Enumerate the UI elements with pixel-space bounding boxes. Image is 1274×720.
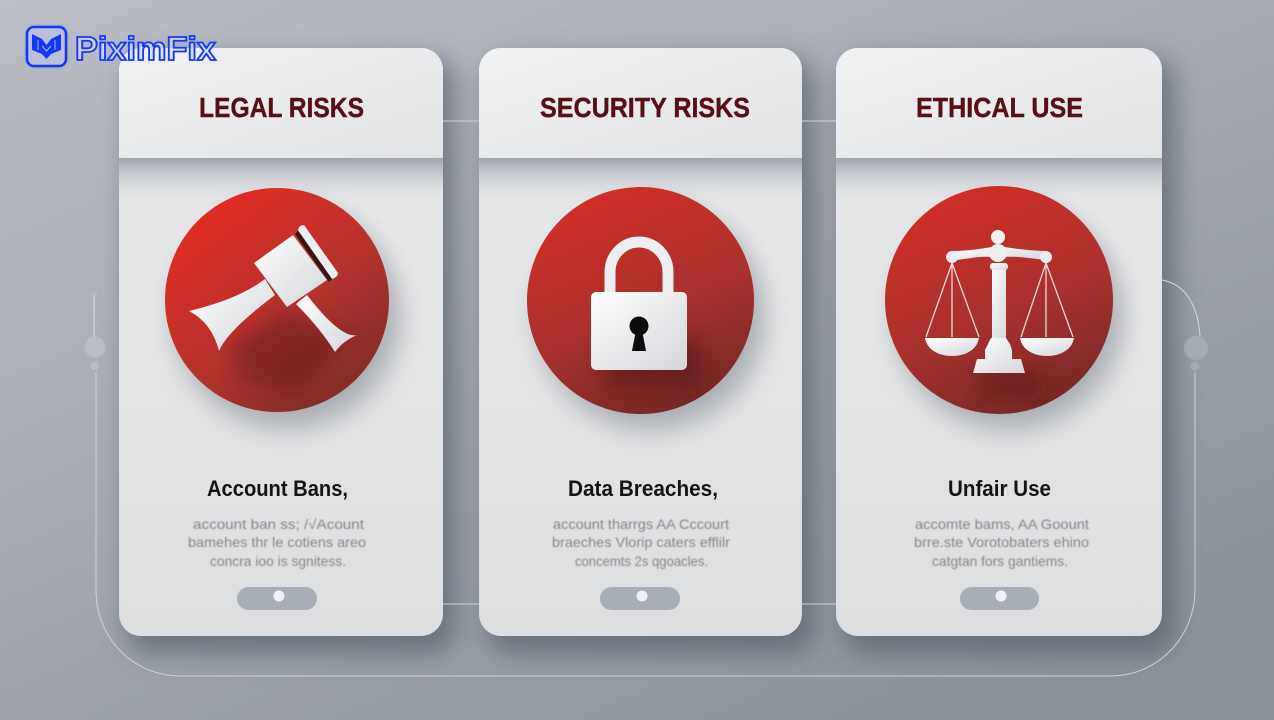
panel: security risks — [479, 48, 802, 636]
description text — [188, 516, 366, 569]
description text: brre.ste Vorotobaters ehino — [914, 534, 1089, 550]
pill indicator — [600, 587, 680, 610]
card header — [119, 48, 443, 158]
pill indicator — [960, 587, 1039, 610]
card header — [479, 48, 802, 158]
heading: ETHICAL USE — [916, 92, 1083, 123]
logo wordmark: PiximFix — [75, 30, 217, 67]
description text: account tharrgs AA Cccourt — [553, 516, 729, 532]
panel: ethical use — [836, 48, 1162, 636]
card body — [119, 48, 443, 636]
icon: padlock — [527, 187, 754, 414]
card body — [479, 48, 802, 636]
icon shadow — [538, 203, 764, 429]
icon shadow — [175, 204, 399, 428]
card shadows — [126, 58, 1175, 654]
description text: accomte bams, AA Goount — [915, 516, 1089, 532]
icon: balance scales — [885, 186, 1113, 414]
card header — [836, 48, 1162, 158]
subheading: Unfair Use — [948, 476, 1051, 501]
node: left connector — [84, 292, 106, 370]
icon: gavel — [165, 188, 389, 412]
description text: concemts 2s qgoacles. — [575, 553, 708, 569]
connector lines — [94, 121, 1200, 676]
icon shadow — [896, 203, 1122, 429]
description text: concra ioo is sgnitess. — [210, 553, 346, 569]
node: right connector — [1184, 336, 1208, 370]
panel: legal risks — [119, 48, 443, 636]
heading: SECURITY RISKS — [540, 92, 750, 123]
card body — [836, 48, 1162, 636]
description text: account ban ss; /√Acount — [193, 516, 364, 532]
logo mark — [26, 26, 67, 67]
heading: LEGAL RISKS — [199, 92, 364, 123]
description text — [914, 516, 1089, 569]
description text: catgtan fors gantiems. — [932, 553, 1068, 569]
subheading: Data Breaches, — [568, 476, 718, 501]
pill indicator — [237, 587, 317, 610]
logo — [26, 26, 217, 67]
description text — [552, 516, 730, 569]
subheading: Account Bans, — [207, 476, 348, 501]
description text: bamehes thr le cotiens areo — [188, 534, 366, 550]
description text: braeches Vlorip caters efflilr — [552, 534, 730, 550]
